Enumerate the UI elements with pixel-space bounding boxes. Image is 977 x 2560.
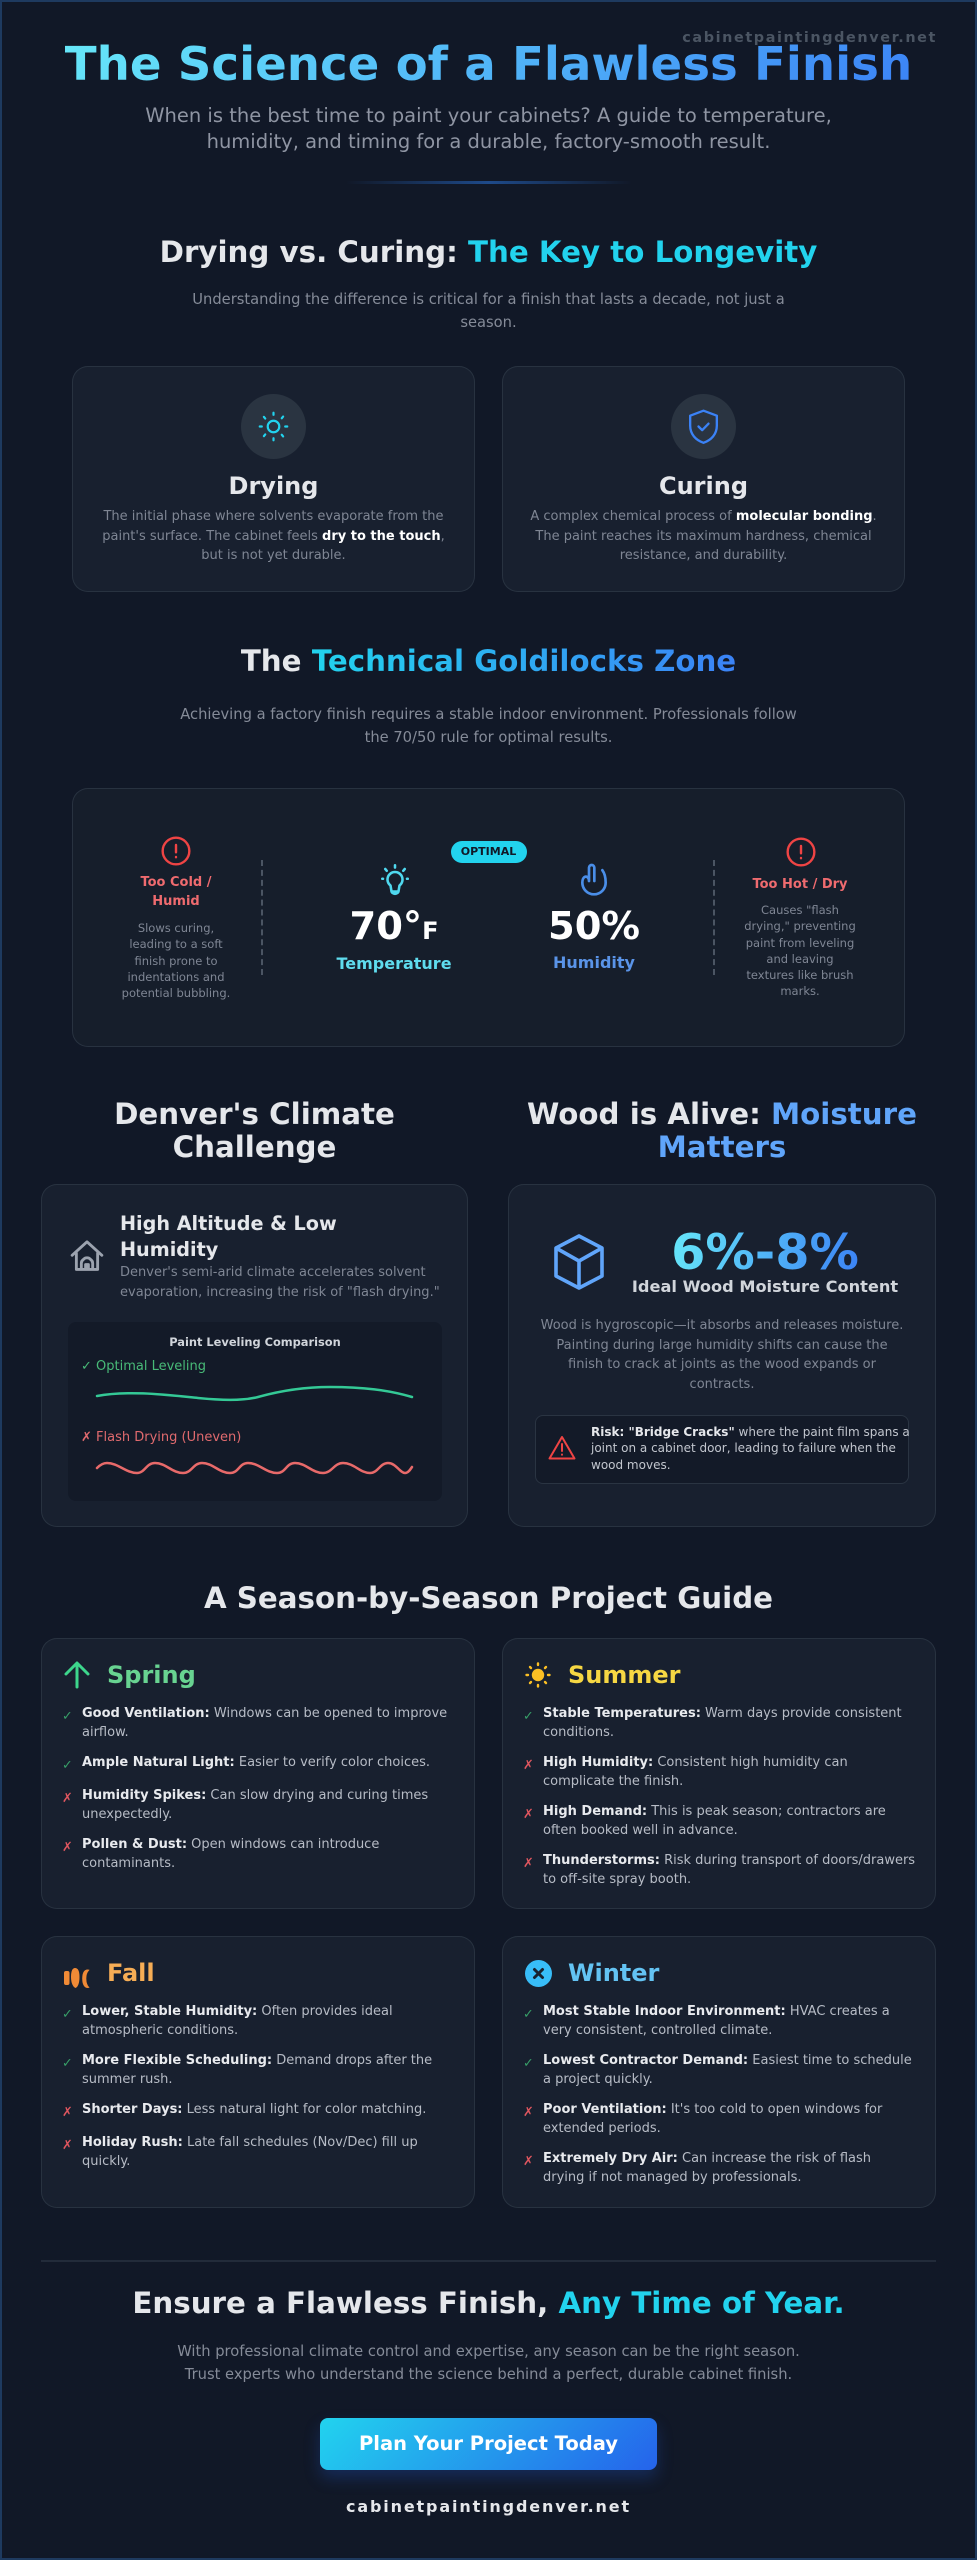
- curing description: The paint reaches its maximum hardness, chemical: [535, 529, 872, 544]
- fall item 2: summer rush.: [82, 2072, 173, 2087]
- spring item 1: airflow.: [82, 1725, 129, 1740]
- too cold title: [140, 875, 212, 909]
- winter item 1: [543, 2002, 890, 2041]
- subtitle: When is the best time to paint your cabinets? A guide to temperature,: [145, 104, 832, 127]
- heading: goldilocks zone: Technical Goldilocks Zone: [312, 644, 736, 678]
- chart title: Paint Leveling Comparison: [169, 1335, 341, 1349]
- icon: bulb: [381, 864, 409, 896]
- too cold text: [122, 921, 230, 1000]
- too cold text: indentations and: [127, 970, 224, 984]
- heading: denver climate: Denver's Climate: [114, 1097, 395, 1131]
- climate heading: [120, 1212, 337, 1261]
- panel: fall: ✗: [62, 2138, 73, 2152]
- too cold title: Too Cold /: [140, 875, 212, 890]
- footer text: Trust experts who understand the science behind a perfect, durable cabinet finish.: [185, 2366, 792, 2382]
- spring item 4: contaminants.: [82, 1856, 175, 1871]
- fall item 1: Lower, Stable Humidity: Often provides ideal: [82, 2004, 393, 2018]
- right divider: [713, 860, 715, 975]
- icon: cube: [554, 1234, 604, 1290]
- heading: denver climate: [114, 1097, 395, 1164]
- intro text: drying vs curing: season.: [460, 314, 517, 330]
- too cold title: Humid: [152, 894, 200, 909]
- subtitle: [145, 104, 832, 153]
- panel: winter: ✓: [523, 2006, 534, 2022]
- intro text: goldilocks: [180, 706, 797, 746]
- icon: leaves: [64, 1968, 90, 1988]
- fall item 1: [62, 2004, 393, 2038]
- panel: fall: ✓: [62, 2056, 73, 2070]
- drying description: The initial phase where solvents evaporate from the: [103, 509, 444, 524]
- panel: spring: ✗: [62, 1840, 73, 1854]
- left divider: [261, 860, 263, 975]
- icon: house: [70, 1240, 104, 1271]
- climate text: Denver's semi-arid climate accelerates solvent: [120, 1265, 426, 1280]
- winter item 4: drying if not managed by professionals.: [543, 2170, 802, 2185]
- humidity label: Humidity: [553, 953, 635, 972]
- moisture value: 6%-8%: [671, 1223, 859, 1281]
- heading: goldilocks zone: The: [241, 644, 302, 678]
- panel: winter: [502, 1936, 936, 2208]
- too hot text: [744, 903, 856, 998]
- winter item 3: [543, 2100, 882, 2139]
- panel: summer: ✗: [523, 1856, 534, 1870]
- panel: winter: ✓: [523, 2056, 534, 2070]
- fall title: Fall: [107, 1959, 155, 1987]
- summer item 4: to off-site spray booth.: [543, 1872, 691, 1887]
- climate text: evaporation, increasing the risk of "flash drying.": [120, 1285, 440, 1300]
- icon: arrow up: [64, 1661, 90, 1688]
- risk text: [590, 1425, 910, 1472]
- optimal label: ✓ Optimal Leveling: [81, 1359, 206, 1374]
- too cold text: finish prone to: [134, 954, 218, 968]
- risk text: joint on a cabinet door, leading to failure when the: [591, 1441, 896, 1455]
- heading: denver climate: Challenge: [173, 1130, 336, 1164]
- moisture text: Wood is hygroscopic—it absorbs and releases moisture.: [541, 1318, 903, 1333]
- spring item 1: [62, 1706, 447, 1740]
- heading: wood is alive: Matters: [658, 1130, 786, 1164]
- icon: shield: [671, 394, 736, 459]
- panel: goldilocks zone: [72, 788, 905, 1047]
- icon: sun: [525, 1662, 551, 1688]
- subtitle: humidity, and timing for a durable, factory-smooth result.: [207, 130, 770, 153]
- intro text: drying vs curing: [192, 291, 785, 330]
- icon: too cold alert: [162, 836, 190, 866]
- panel: fall: [41, 1936, 475, 2208]
- call to action button: Plan Your Project Today: [359, 2432, 618, 2455]
- panel: summer: [502, 1638, 936, 1909]
- fall item 2: [62, 2052, 432, 2087]
- fall item 1: atmospheric conditions.: [82, 2023, 238, 2038]
- summer item 3: often booked well in advance.: [543, 1823, 738, 1838]
- footer heading: Ensure a Flawless Finish, Any Time of Year.: [132, 2286, 845, 2320]
- panel: wood moisture: [508, 1184, 936, 1527]
- spring item 3: Humidity Spikes: Can slow drying and curing times: [82, 1788, 428, 1802]
- footer divider: [41, 2260, 936, 2262]
- heading: drying vs curing: Drying vs. Curing: The Key to Longevity: [160, 235, 817, 269]
- heading: season guide: A Season-by-Season Project Guide: [204, 1581, 773, 1615]
- panel: spring: ✓: [62, 1708, 73, 1724]
- temperature value: 70°F: [349, 904, 439, 949]
- too hot text: drying," preventing: [744, 919, 856, 933]
- winter item 3: Poor Ventilation: It's too cold to open windows for: [543, 2102, 882, 2116]
- watermark: cabinetpaintingdenver.net: [682, 30, 937, 46]
- humidity value: 50%: [548, 904, 640, 949]
- panel: spring: ✓: [62, 1758, 73, 1772]
- optimal badge: [450, 841, 526, 863]
- too cold text: Slows curing,: [138, 921, 214, 935]
- moisture text: Painting during large humidity shifts can cause the: [556, 1338, 888, 1353]
- curing description: resistance, and durability.: [620, 548, 787, 563]
- moisture caption: Ideal Wood Moisture Content: [632, 1277, 898, 1296]
- icon: warning triangle: [548, 1436, 576, 1460]
- footer text: [0, 2341, 977, 2386]
- heading: wood is alive: [527, 1097, 917, 1164]
- intro text: goldilocks: the 70/50 rule for optimal results.: [365, 728, 612, 746]
- fall item 2: More Flexible Scheduling: Demand drops after the: [82, 2052, 432, 2068]
- summer item 3: [523, 1804, 886, 1838]
- intro text: goldilocks: Achieving a factory finish requires a stable indoor environment. Professionals follow: [180, 706, 797, 723]
- chart: paint leveling comparison: [68, 1322, 442, 1501]
- fall item 3: Shorter Days: Less natural light for color matching.: [82, 2102, 426, 2116]
- winter item 2: Lowest Contractor Demand: Easiest time to schedule: [543, 2052, 912, 2068]
- summer item 1: Stable Temperatures: Warm days provide consistent: [543, 1706, 902, 1720]
- flash drying label: ✗ Flash Drying (Uneven): [81, 1430, 241, 1445]
- summer item 2: [523, 1754, 848, 1789]
- summer item 4: Thunderstorms: Risk during transport of doors/drawers: [543, 1852, 915, 1868]
- spring item 4: [62, 1836, 379, 1871]
- intro text: drying vs curing: Understanding the difference is critical for a finish that lasts a decade, not just a: [192, 291, 785, 308]
- winter title: Winter: [568, 1959, 659, 1987]
- too cold text: potential bubbling.: [122, 986, 230, 1000]
- curing title: Curing: [659, 472, 748, 500]
- too hot text: and leaving: [766, 952, 834, 966]
- spring title: Spring: [107, 1661, 196, 1689]
- winter item 4: [543, 2148, 871, 2188]
- temperature label: Temperature: [336, 954, 452, 973]
- icon: sun: [241, 394, 306, 459]
- too hot text: paint from leveling: [746, 936, 854, 950]
- summer title: Summer: [568, 1661, 680, 1689]
- call to action button: [320, 2418, 657, 2470]
- header divider: [346, 181, 632, 184]
- panel: summer: ✓: [523, 1708, 534, 1724]
- summer item 4: [523, 1852, 915, 1887]
- icon: snow badge: [525, 1960, 552, 1987]
- panel: winter: ✗: [523, 2154, 534, 2168]
- too cold text: leading to a soft: [129, 937, 223, 951]
- panel: fall: ✗: [62, 2104, 73, 2120]
- risk text: wood moves.: [591, 1458, 671, 1472]
- risk text: Risk: "Bridge Cracks" where the paint film spans a: [591, 1425, 910, 1439]
- panel: drying: [72, 366, 475, 592]
- winter item 1: very consistent, controlled climate.: [543, 2023, 772, 2038]
- climate text: [120, 1265, 440, 1300]
- risk callout: [535, 1415, 909, 1484]
- spring item 3: [62, 1788, 428, 1822]
- summer item 3: High Demand: This is peak season; contractors are: [543, 1804, 886, 1818]
- too hot title: Too Hot / Dry: [752, 877, 848, 892]
- moisture text: [541, 1318, 903, 1392]
- summer item 2: complicate the finish.: [543, 1774, 683, 1789]
- fall item 4: quickly.: [82, 2154, 130, 2169]
- fall item 4: [82, 2132, 418, 2172]
- fall item 4: Holiday Rush: Late fall schedules (Nov/Dec) fill up: [82, 2134, 418, 2150]
- panel: denver climate: [41, 1184, 468, 1527]
- panel: summer: ✗: [523, 1806, 534, 1822]
- panel: spring: [41, 1638, 475, 1909]
- spring item 1: Good Ventilation: Windows can be opened to improve: [82, 1706, 447, 1720]
- curing description: A complex chemical process of molecular bonding.: [530, 509, 877, 524]
- footer text: With professional climate control and expertise, any season can be the right season.: [177, 2343, 800, 2360]
- drying description: [102, 509, 445, 563]
- summer item 1: conditions.: [543, 1725, 614, 1740]
- panel: curing: [502, 366, 905, 592]
- spring item 4: Pollen & Dust: Open windows can introduce: [82, 1836, 379, 1852]
- winter item 1: Most Stable Indoor Environment: HVAC creates a: [543, 2004, 890, 2018]
- moisture text: finish to crack at joints as the wood expands or: [568, 1357, 876, 1372]
- panel: winter: ✗: [523, 2104, 534, 2120]
- heading: wood is alive: Wood is Alive: Moisture: [527, 1097, 917, 1131]
- drying title: Drying: [229, 472, 318, 500]
- summer item 1: [523, 1706, 902, 1740]
- too hot text: Causes "flash: [761, 903, 839, 917]
- spring item 3: unexpectedly.: [82, 1807, 172, 1822]
- summer item 2: High Humidity: Consistent high humidity can: [543, 1754, 848, 1770]
- winter item 2: [543, 2050, 912, 2090]
- too hot text: textures like brush: [746, 968, 854, 982]
- curves: [96, 1386, 414, 1474]
- drying description: but is not yet durable.: [201, 548, 346, 563]
- optimal badge: OPTIMAL: [461, 845, 516, 858]
- climate heading: High Altitude & Low: [120, 1212, 337, 1235]
- title: The Science of a Flawless Finish: [65, 38, 912, 92]
- climate heading: Humidity: [120, 1238, 218, 1261]
- drying description: paint's surface. The cabinet feels dry to the touch,: [102, 529, 445, 544]
- icon: hand: [581, 864, 607, 896]
- panel: spring: ✗: [62, 1790, 73, 1806]
- too hot text: marks.: [780, 984, 820, 998]
- panel: summer: ✗: [523, 1758, 534, 1772]
- winter item 3: extended periods.: [543, 2121, 661, 2136]
- moisture text: contracts.: [690, 1377, 754, 1392]
- website: cabinetpaintingdenver.net: [346, 2497, 631, 2516]
- panel: fall: ✓: [62, 2006, 73, 2022]
- winter item 4: Extremely Dry Air: Can increase the risk of flash: [543, 2150, 871, 2166]
- icon: too hot alert: [786, 838, 816, 866]
- spring item 2: Ample Natural Light: Easier to verify color choices.: [82, 1754, 430, 1770]
- curing description: [530, 509, 877, 563]
- winter item 2: a project quickly.: [543, 2072, 653, 2087]
